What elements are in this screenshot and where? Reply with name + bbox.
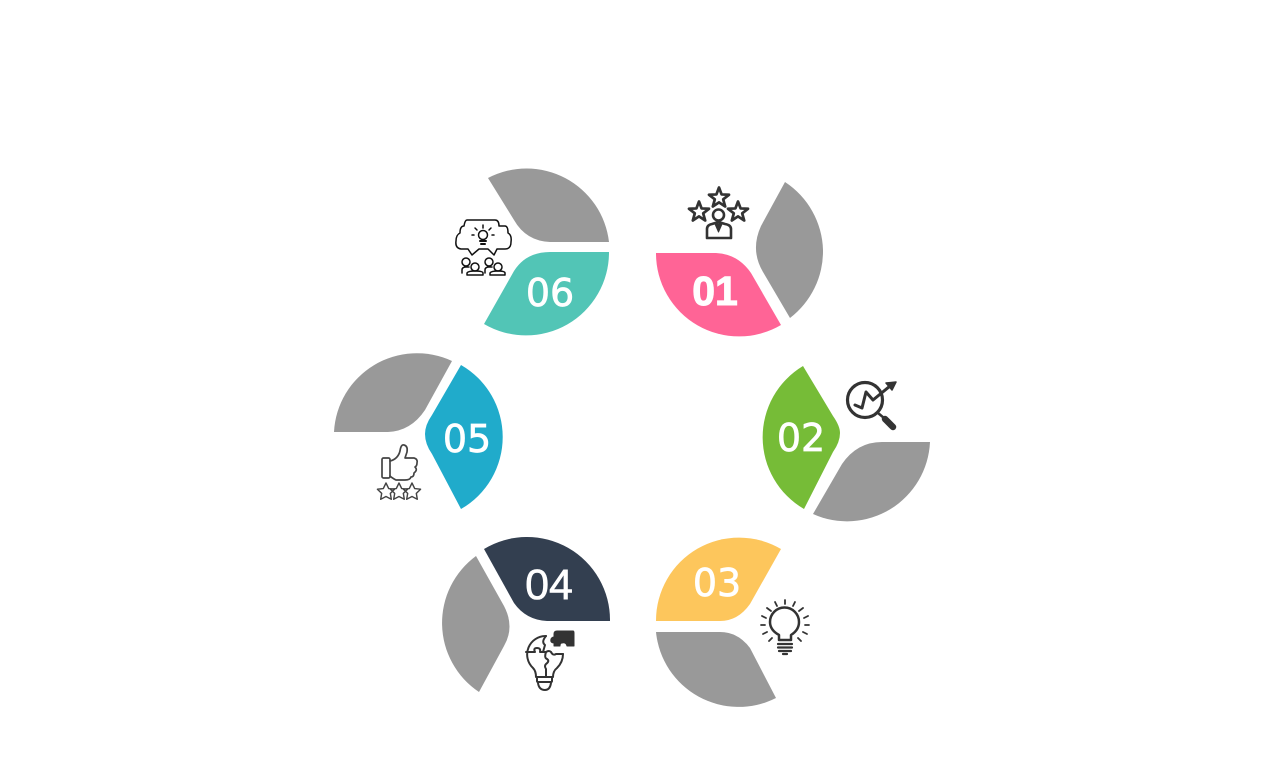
petal: 06 teal [484, 252, 609, 335]
step 01 [656, 182, 823, 336]
icon: puzzle bulb [526, 631, 574, 690]
number 02: 02 [777, 416, 825, 460]
petal: 02 grey [813, 442, 930, 521]
petal: 05 grey [334, 353, 452, 432]
icon: light bulb [761, 600, 809, 654]
number 04: 04 [525, 561, 573, 609]
step 05 [334, 353, 503, 509]
step 03 [656, 538, 809, 707]
icon: person with three stars [689, 188, 748, 238]
petal: 03 yellow [656, 538, 781, 621]
petal: 03 grey [656, 632, 776, 707]
petal: 06 grey [488, 169, 609, 242]
petal: 02 green [763, 366, 840, 509]
petal: 05 blue [425, 365, 503, 509]
step 04 [442, 537, 610, 692]
petal: 01 pink [656, 253, 781, 336]
petal: 01 grey [756, 182, 823, 318]
icon: magnifier with trend arrow [848, 382, 896, 427]
icon: group idea cloud [456, 220, 511, 275]
petal: 04 navy [484, 537, 610, 621]
number 06: 06 [526, 271, 574, 315]
number 05: 05 [443, 417, 491, 461]
icon: thumbs up with three stars [377, 445, 421, 499]
number 01: 01 [692, 268, 738, 314]
step 02 [763, 366, 930, 521]
step 06 [456, 169, 609, 335]
petal: 04 grey [442, 556, 510, 692]
number 03: 03 [693, 561, 741, 605]
